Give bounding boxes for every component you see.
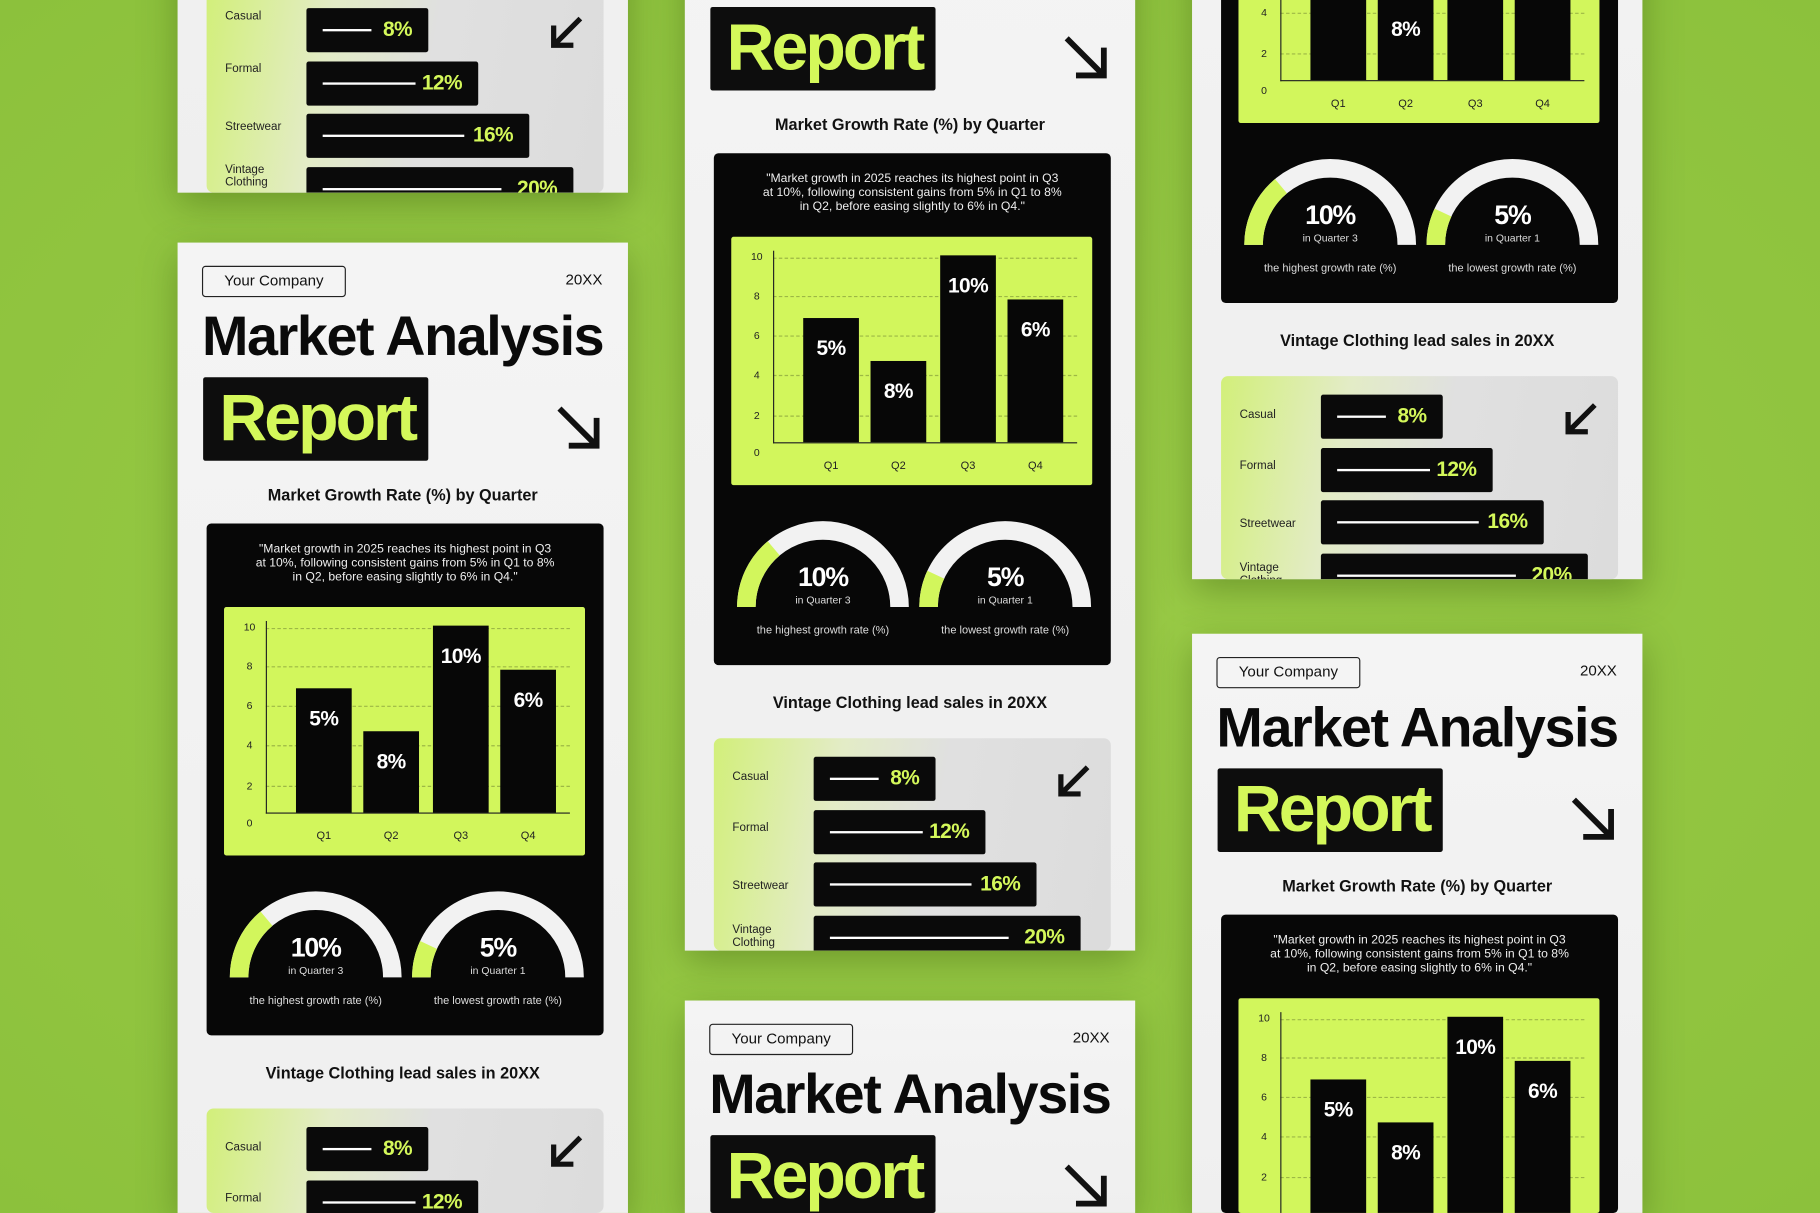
bar chart: Q3: [453, 830, 468, 843]
bar chart: 2: [247, 780, 252, 792]
card: right column bottom page: 6%: [1528, 1079, 1557, 1103]
gray panel: category sales: 8%: [383, 1136, 412, 1160]
card: middle column bottom page: Your Company: [732, 1030, 831, 1047]
bar chart: 0: [247, 817, 252, 829]
black panel: "Market growth in 2025 reaches its highest point in Q3 at 10%, following consistent gains from 5% in Q1 to 8% in Q2, before easing slightly to 6% in Q4.": [256, 542, 554, 583]
black panel: 6: [754, 330, 760, 341]
gauge: lowest: 5%: [480, 932, 516, 962]
card: right column bottom page: 2: [1261, 1171, 1267, 1183]
card: right column bottom page: Your Company: [1239, 663, 1338, 680]
gray panel: category sales: 12%: [422, 1190, 462, 1213]
black panel: in Quarter 3: [795, 594, 851, 606]
gray panel: Vintage: [732, 924, 772, 937]
bar chart: Q2: [384, 830, 399, 843]
gray panel: Formal: [732, 822, 769, 835]
black panel: 10%: [798, 562, 848, 592]
gray panel: Casual: [732, 771, 769, 783]
card: right column top page: Streetwear: [1240, 518, 1296, 530]
icon: arrow down-right: [558, 406, 600, 449]
card: right column top page: in Quarter 3: [1303, 232, 1358, 244]
card: right column bottom page: 20XX: [1580, 662, 1617, 679]
gray panel: category sales: Formal: [225, 1192, 261, 1205]
card: right column bottom page: Market Growth Rate (%) by Quarter: [1282, 876, 1552, 895]
card: middle column bottom page: Report: [727, 1139, 922, 1213]
bar chart: 8: [247, 660, 252, 672]
black panel: Q1: [824, 460, 838, 472]
card: right column top page: Q4: [1535, 97, 1550, 110]
card: right column top page: the highest growth rate (%): [1264, 262, 1396, 275]
card: right column top page: 4: [1261, 7, 1267, 19]
card: right column top page: Q1: [1331, 97, 1346, 110]
card: right column top page: 8%: [1397, 404, 1427, 427]
gray panel: 12%: [929, 819, 969, 843]
gray panel: category sales: 8%: [383, 17, 412, 41]
card: right column top page: Vintage: [1240, 562, 1279, 575]
card: right column top page: 10%: [1305, 200, 1355, 230]
card: right column top page: Vintage Clothing lead sales in 20XX: [1280, 331, 1554, 349]
card: right column top page: Casual: [1240, 409, 1276, 421]
bar chart: 10: [244, 621, 255, 633]
card: right column bottom page: 8: [1261, 1052, 1267, 1063]
gray panel: [714, 738, 1111, 951]
black panel: Q4: [1028, 460, 1043, 472]
gray panel: 16%: [980, 872, 1020, 895]
black panel: 5%: [987, 562, 1023, 592]
gray panel: 20%: [1024, 925, 1064, 948]
black panel: [714, 153, 1111, 665]
card: right column bottom page: 8%: [1391, 1141, 1420, 1164]
gray panel: category sales: Streetwear: [225, 121, 281, 133]
black panel: 8: [754, 290, 760, 302]
black panel: 5%: [817, 337, 846, 360]
gray panel: Streetwear: [732, 880, 789, 893]
gray panel: category sales: 12%: [422, 71, 462, 94]
card: right column bottom page: 4: [1261, 1131, 1267, 1142]
bar chart: Q1: [316, 830, 331, 843]
chart heading: Market Growth Rate (%) by Quarter: [775, 115, 1045, 133]
card: right column top page: the lowest growth rate (%): [1448, 262, 1576, 275]
gray panel: 8%: [890, 766, 919, 789]
card: right column bottom page: "Market growth in 2025 reaches its highest point in Q3 at 10%, following consistent gains from 5% in Q1 to 8% in Q2, before easing slightly to 6% in Q4.": [1270, 933, 1569, 975]
chart heading: Market Growth Rate (%) by Quarter: [268, 485, 538, 504]
report label: Report: [219, 381, 415, 455]
card: top-left fragment: [178, 0, 628, 193]
company tag: Your Company: [224, 272, 324, 289]
black panel: [207, 523, 604, 1035]
gray panel: category sales: Clothing: [225, 176, 268, 189]
black panel: 6%: [1021, 318, 1050, 341]
gauge: lowest: in Quarter 1: [470, 965, 526, 976]
company tag: [202, 266, 346, 297]
card: right column bottom page: Report: [1234, 772, 1430, 846]
gray panel: category sales: Formal: [225, 63, 261, 75]
card: right column top page: 5%: [1494, 200, 1531, 230]
gauge: highest: [230, 891, 402, 1007]
card: right column top page: [1192, 0, 1642, 579]
card: right column top page: Q3: [1468, 97, 1483, 110]
gray panel: category sales: Casual: [225, 1141, 261, 1154]
card: middle column bottom page: Market Analysis: [709, 1064, 1110, 1126]
title: Market Analysis: [202, 306, 603, 368]
black panel: 8%: [884, 380, 913, 403]
gray panel: category sales: [207, 0, 604, 193]
card: middle column bottom page: [685, 1001, 1135, 1213]
black panel: "Market growth in 2025 reaches its highest point in Q3 at 10%, following consistent gains from 5% in Q1 to 8% in Q2, before easing slightly to 6% in Q4.": [763, 172, 1062, 213]
card: right column bottom page: Market Analysis: [1216, 698, 1618, 759]
black panel: the highest growth rate (%): [757, 624, 889, 637]
bar chart: 4: [247, 739, 252, 751]
icon: arrow: [1064, 36, 1107, 78]
card: right column top page: Q2: [1398, 97, 1413, 110]
gray panel: category sales: 16%: [473, 123, 513, 146]
bar chart: 5%: [309, 707, 338, 730]
black panel: 2: [754, 410, 760, 421]
gauge: lowest: [412, 891, 584, 1007]
report label: Report: [727, 10, 922, 85]
card: right column top page: 8%: [1391, 17, 1420, 41]
gray panel: category sales: [207, 1108, 604, 1213]
gray panel: category sales: Vintage: [225, 164, 264, 176]
card: right column top page: in Quarter 1: [1485, 232, 1540, 244]
black panel: 10%: [948, 274, 988, 297]
gauge: highest: the highest growth rate (%): [250, 995, 382, 1007]
sales heading: Vintage Clothing lead sales in 20XX: [266, 1063, 540, 1082]
card: main left page: [178, 243, 628, 1213]
gauge: highest: 10%: [291, 932, 341, 962]
black panel: Q2: [891, 460, 906, 472]
card: right column bottom page: 5%: [1324, 1098, 1353, 1121]
black panel: the lowest growth rate (%): [941, 624, 1069, 637]
card: right column top page: 12%: [1436, 457, 1476, 481]
bar chart: Q4: [521, 830, 535, 843]
gray panel: category sales: Casual: [225, 10, 261, 23]
black panel: Q3: [961, 460, 975, 472]
gauge: highest: in Quarter 3: [288, 965, 343, 976]
bar chart: 6: [247, 700, 252, 712]
bar chart: 6%: [514, 688, 543, 712]
card: right column top page: 16%: [1487, 510, 1527, 533]
bar chart: 10%: [441, 644, 481, 667]
gray panel: Clothing: [732, 937, 775, 949]
card: right column bottom page: 10: [1258, 1012, 1270, 1024]
bar chart: 8%: [377, 750, 406, 773]
card: right column top page: Formal: [1240, 460, 1276, 472]
sales heading: Vintage Clothing lead sales in 20XX: [773, 693, 1047, 712]
card: right column bottom page: [1192, 634, 1642, 1213]
card: middle column bottom page: 20XX: [1073, 1028, 1110, 1046]
black panel: 10: [751, 251, 763, 262]
black panel: in Quarter 1: [978, 594, 1033, 606]
card: right column top page: 2: [1261, 48, 1267, 59]
card: right column bottom page: 10%: [1455, 1035, 1495, 1059]
black panel: 0: [754, 447, 760, 458]
card: right column bottom page: 6: [1261, 1091, 1267, 1103]
card: middle column top page: [685, 0, 1135, 951]
gauge: lowest: the lowest growth rate (%): [434, 995, 562, 1007]
black panel: 4: [754, 369, 760, 381]
bar chart: [224, 607, 585, 855]
card: right column top page: 0: [1261, 85, 1267, 96]
year: 20XX: [565, 270, 602, 288]
